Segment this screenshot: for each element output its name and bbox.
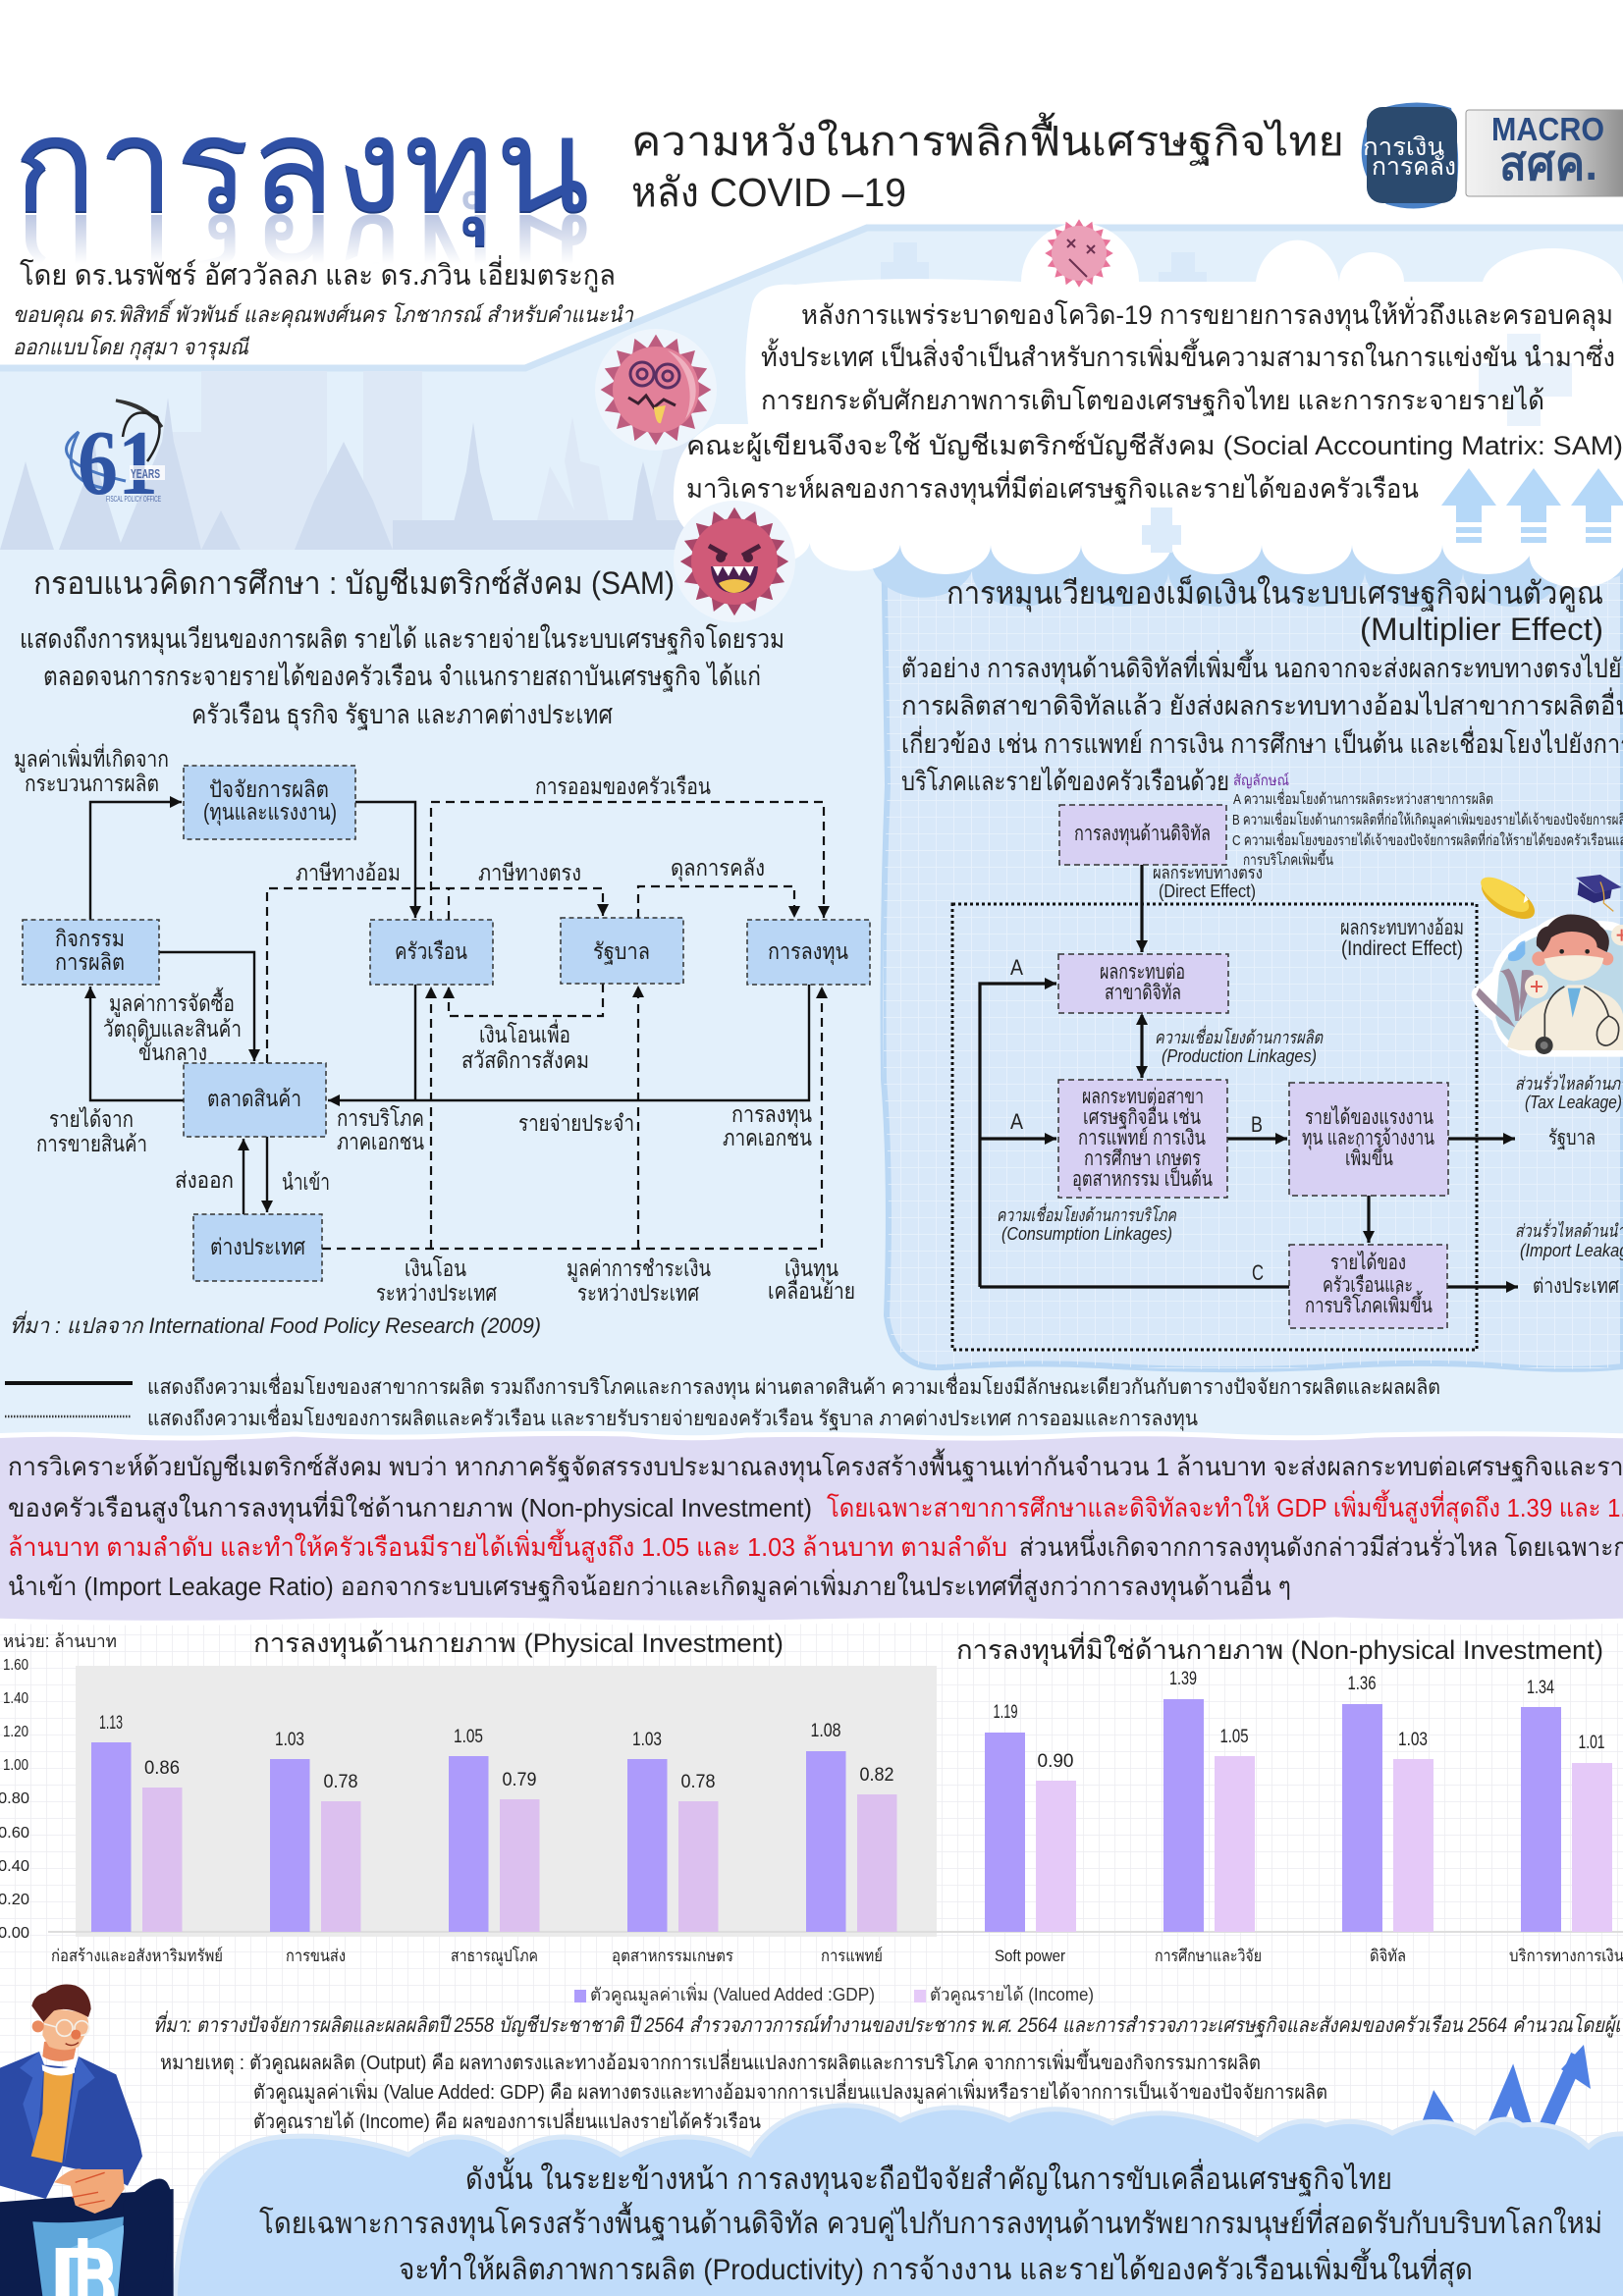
dashed flows <box>267 802 824 1249</box>
category labels <box>51 1946 883 1966</box>
flow labels <box>997 823 1623 1317</box>
logo: MACRO สศค. <box>1466 110 1623 196</box>
value labels: 0.78 <box>681 1772 715 1792</box>
flow labels: (Consumption Linkages) <box>1001 1224 1172 1244</box>
flow labels: การศึกษา เกษตร <box>1084 1148 1201 1170</box>
intro text <box>686 296 1623 506</box>
symbols key: สัญลักษณ์ <box>1233 773 1289 789</box>
diagram labels: ต่างประเทศ <box>210 1234 305 1259</box>
panel: SAM framework <box>10 565 870 1338</box>
SAM description: แสดงถึงการหมุนเวียนของการผลิต รายได้ และรายจ่ายในระบบเศรษฐกิจโดยรวม <box>20 623 784 656</box>
flow labels: ผลกระทบต่อ <box>1100 961 1185 984</box>
diagram labels: ครัวเรือน <box>395 938 467 964</box>
flow labels: A <box>1010 1109 1023 1134</box>
logo: 61 years: 61 <box>78 412 158 514</box>
logo: 61 years: YEARS <box>131 466 160 481</box>
diagram labels: วัตถุดิบและสินค้า <box>103 1016 242 1042</box>
bars <box>985 1699 1612 1932</box>
analysis text: ของครัวเรือนสูงในการลงทุนที่มิใช่ด้านกายภาพ (Non-physical Investment) <box>8 1490 812 1523</box>
value labels: 1.08 <box>811 1721 840 1741</box>
flow labels: สาขาดิจิทัล <box>1105 982 1181 1004</box>
unit label: หน่วย: ล้านบาท <box>3 1631 117 1651</box>
pale plus marks inside cloud <box>1142 334 1572 553</box>
logo: การเงินการคลัง: การเงิน <box>1363 133 1444 161</box>
flow labels: ผลกระทบต่อสาขา <box>1082 1086 1204 1108</box>
flow labels: ผลกระทบทางตรง <box>1153 863 1263 882</box>
diagram labels: ส่งออก <box>175 1167 234 1193</box>
chart legend: ตัวคูณรายได้ (Income) <box>930 1984 1094 2005</box>
diagram labels: กระบวนการผลิต <box>25 771 159 796</box>
multiplier description: บริโภคและรายได้ของครัวเรือนด้วย <box>901 767 1229 796</box>
value labels: 0.90 <box>1037 1751 1074 1772</box>
value labels: 1.01 <box>1579 1733 1604 1753</box>
category labels: การขนส่ง <box>286 1947 346 1965</box>
flow labels: รัฐบาล <box>1548 1127 1596 1149</box>
diagram labels: สวัสดิการสังคม <box>461 1047 589 1073</box>
flow boxes <box>1058 805 1448 1328</box>
diagram labels: ดุลการคลัง <box>671 855 765 881</box>
y axis ticks: 1.00 <box>3 1757 28 1774</box>
diagram labels: รายจ่ายประจำ <box>518 1110 634 1136</box>
title: การลงทุน <box>13 93 590 245</box>
diagram labels: กิจกรรม <box>55 926 125 951</box>
chart: non-physical investment <box>956 1631 1623 1965</box>
value labels: 1.19 <box>994 1702 1017 1723</box>
flow labels: (Direct Effect) <box>1159 881 1256 901</box>
diagram labels: ขั้นกลาง <box>138 1037 207 1065</box>
diagram labels <box>14 743 855 1306</box>
flow labels: B <box>1251 1112 1263 1137</box>
conclusion text <box>259 2158 1602 2288</box>
chart title: การลงทุนที่มิใช่ด้านกายภาพ (Non-physical Investment) <box>956 1631 1603 1667</box>
icon: growth arrow <box>1420 2045 1591 2169</box>
diagram labels: การขายสินค้า <box>36 1131 147 1156</box>
intro text: คณะผู้เขียนจึงจะใช้ บัญชีเมตริกซ์บัญชีสังคม (Social Accounting Matrix: SAM) <box>686 430 1623 461</box>
diagram labels: ภาษีทางตรง <box>478 860 581 885</box>
value labels: 1.03 <box>275 1730 304 1750</box>
conclusion text: ดังนั้น ในระยะข้างหน้า การลงทุนจะถือปัจจัยสำคัญในการขับเคลื่อนเศรษฐกิจไทย <box>465 2158 1392 2198</box>
analysis text: ล้านบาท ตามลำดับ และทำให้ครัวเรือนมีรายได้เพิ่มขึ้นสูงถึง 1.05 และ 1.03 ล้านบาท ตามลำดับ <box>8 1528 1007 1563</box>
legend lines: แสดงถึงความเชื่อมโยงของสาขาการผลิต รวมถึงการบริโภคและการลงทุน ผ่านตลาดสินค้า ความเชื่อมโยงมีลักษณะเดียวกันกับตารางปัจจัยการผลิตและผลผลิต <box>147 1372 1440 1400</box>
chart title: การลงทุนด้านกายภาพ (Physical Investment) <box>253 1629 784 1660</box>
heading: multiplier: (Multiplier Effect) <box>1360 612 1603 647</box>
value labels: 0.78 <box>324 1772 357 1792</box>
plot area <box>76 1666 937 1937</box>
analysis text <box>8 1448 1623 1602</box>
notes: ตัวคูณรายได้ (Income) คือ ผลของการเปลี่ยนแปลงรายได้ครัวเรือน <box>253 2108 761 2134</box>
category labels: สาธารณูปโภค <box>451 1946 538 1966</box>
notes <box>160 2049 1327 2134</box>
intro cloud backdrop <box>674 223 1623 588</box>
logo: MACRO สศค.: สศค. <box>1499 138 1597 190</box>
right panel: multiplier background <box>884 530 1623 1369</box>
diagram labels: การลงทุน <box>731 1101 812 1128</box>
flow labels: การบริโภคเพิ่มขึ้น <box>1305 1291 1433 1317</box>
diagram labels: เงินทุน <box>784 1255 839 1282</box>
logo: การเงินการคลัง: การคลัง <box>1372 153 1456 181</box>
legend lines: แสดงถึงความเชื่อมโยงของการผลิตและครัวเรือน และรายรับรายจ่ายของครัวเรือน รัฐบาล ภาคต่างประเทศ การออมและการลงทุน <box>147 1404 1198 1431</box>
SAM description: ตลอดจนการกระจายรายได้ของครัวเรือน จำแนกรายสถาบันเศรษฐกิจ ได้แก่ <box>43 662 761 692</box>
subtitle <box>631 112 1344 215</box>
acknowledgements: ออกแบบโดย กุสุมา จารุมณี <box>13 335 250 360</box>
logo: การเงินการคลัง <box>1362 102 1458 208</box>
title: การลงทุน <box>13 95 590 247</box>
node boxes <box>23 766 870 1281</box>
authors: โดย ดร.นรพัชร์ อัศววัลลภ และ ดร.ภวิน เอี่ยมตระกูล <box>20 255 616 293</box>
symbols key: การบริโภคเพิ่มขึ้น <box>1243 849 1333 869</box>
y axis ticks: 1.20 <box>3 1724 28 1740</box>
flow labels: (Indirect Effect) <box>1341 937 1463 960</box>
diagram labels: เงินโอน <box>405 1255 466 1281</box>
acknowledgements: ขอบคุณ ดร.พิสิทธิ์ พัวพันธ์ และคุณพงศ์นคร โภชากรณ์ สำหรับคำแนะนำ <box>13 298 634 328</box>
solid flows <box>90 802 809 1214</box>
SAM description: ครัวเรือน ธุรกิจ รัฐบาล และภาคต่างประเทศ <box>191 700 613 731</box>
category labels: ดิจิทัล <box>1370 1947 1406 1965</box>
value labels: 1.05 <box>1219 1727 1249 1747</box>
icon: coin <box>1476 871 1541 927</box>
value labels: 1.13 <box>99 1713 123 1734</box>
heading: SAM: กรอบแนวคิดการศึกษา : บัญชีเมตริกซ์สังคม (SAM) <box>33 565 675 601</box>
flow labels: เพิ่มขึ้น <box>1345 1144 1393 1170</box>
conclusion text: จะทำให้ผลิตภาพการผลิต (Productivity) การจ้างงาน และรายได้ของครัวเรือนเพิ่มขึ้นในที่สุด <box>399 2248 1473 2288</box>
chart: physical investment <box>0 1629 1623 1966</box>
notes: หมายเหตุ : ตัวคูณผลผลิต (Output) คือ ผลทางตรงและทางอ้อมจากการเปลี่ยนแปลงการผลิตและการบริโภค จากการเพิ่มขึ้นของกิจกรรมการผลิต <box>160 2049 1261 2075</box>
flow labels: รายได้ของแรงงาน <box>1305 1105 1434 1129</box>
diagram labels: มูลค่าการจัดซื้อ <box>109 988 235 1017</box>
value labels: 1.39 <box>1169 1669 1197 1689</box>
diagram labels: ภาคเอกชน <box>337 1129 424 1154</box>
icon: doctor <box>1472 914 1623 1057</box>
value labels: 0.82 <box>860 1765 893 1786</box>
y axis ticks: 1.60 <box>3 1657 28 1674</box>
heading: multiplier <box>947 574 1603 647</box>
illustration: man sitting <box>0 1984 174 2296</box>
intro text: การยกระดับศักยภาพการเติบโตของเศรษฐกิจไทย และการกระจายรายได้ <box>761 386 1544 416</box>
diagram labels: ภาษีทางอ้อม <box>296 860 401 885</box>
flow labels: อุตสาหกรรม เป็นต้น <box>1072 1165 1213 1192</box>
flow labels: รายได้ของ <box>1330 1251 1406 1274</box>
arrows <box>980 865 1518 1287</box>
icon: three up arrows <box>1441 468 1623 543</box>
logo: MACRO สศค.: MACRO <box>1491 111 1604 147</box>
symbols key: A ความเชื่อมโยงด้านการผลิตระหว่างสาขาการผลิต <box>1233 788 1493 808</box>
category labels: ก่อสร้างและอสังหาริมทรัพย์ <box>51 1947 223 1965</box>
diagram labels: การออมของครัวเรือน <box>535 774 711 799</box>
multiplier description <box>901 649 1623 796</box>
panel: analysis strip <box>0 1433 1623 1623</box>
flow labels: (Production Linkages) <box>1162 1046 1317 1066</box>
diagram labels: รัฐบาล <box>593 938 650 965</box>
value labels: 1.36 <box>1347 1674 1377 1694</box>
category labels: การศึกษาและวิจัย <box>1155 1947 1262 1965</box>
chart legend <box>574 1982 1094 2005</box>
value labels <box>99 1713 893 1792</box>
panel: conclusion cloud <box>175 2106 1623 2296</box>
value labels <box>994 1669 1604 1772</box>
category labels: การแพทย์ <box>821 1947 883 1965</box>
subtitle: ความหวังในการพลิกฟื้นเศรษฐกิจไทย <box>631 112 1344 166</box>
flow labels: ความเชื่อมโยงด้านการผลิต <box>1155 1025 1324 1047</box>
diagram labels: ระหว่างประเทศ <box>376 1280 497 1306</box>
intro text: มาวิเคราะห์ผลของการลงทุนที่มีต่อเศรษฐกิจและรายได้ของครัวเรือน <box>686 470 1419 506</box>
diagram labels: ระหว่างประเทศ <box>577 1280 699 1306</box>
icon: graduation cap <box>1576 875 1622 911</box>
title reflection: การลงทุน <box>13 181 590 333</box>
value labels: 1.05 <box>454 1727 483 1747</box>
subtitle: หลัง COVID –19 <box>631 170 906 215</box>
analysis text: นำเข้า (Import Leakage Ratio) ออกจากระบบเศรษฐกิจน้อยกว่าและเกิดมูลค่าเพิ่มภายในประเทศที่สูงกว่าการลงทุนด้านอื่น ๆ <box>8 1569 1291 1602</box>
pale plus marks behind cloud <box>881 242 1207 313</box>
diagram labels: เคลื่อนย้าย <box>768 1275 855 1304</box>
SAM flow diagram <box>14 743 870 1306</box>
flow labels: ความเชื่อมโยงด้านการบริโภค <box>997 1202 1177 1225</box>
category labels: Soft power <box>995 1947 1065 1965</box>
flow labels: ทุน และการจ้างงาน <box>1302 1127 1434 1150</box>
diagram labels: (ทุนและแรงงาน) <box>203 799 337 826</box>
axis line <box>48 1931 1623 1933</box>
icon: small virus <box>1045 219 1113 288</box>
flow labels: การลงทุนด้านดิจิทัล <box>1074 823 1211 846</box>
flow labels: A <box>1010 955 1023 980</box>
chart legend: ตัวคูณมูลค่าเพิ่ม (Valued Added :GDP) <box>590 1982 875 2005</box>
y axis ticks: 1.40 <box>3 1690 28 1707</box>
skyline illustration <box>0 371 707 550</box>
SAM description <box>20 623 784 731</box>
diagram labels: เงินโอนเพื่อ <box>479 1019 570 1047</box>
flow labels: เศรษฐกิจอื่น เช่น <box>1083 1102 1201 1129</box>
y axis ticks <box>0 1657 29 1942</box>
flow labels: การแพทย์ การเงิน <box>1078 1126 1206 1149</box>
diagram labels: ภาคเอกชน <box>723 1125 812 1150</box>
flow labels: C <box>1252 1260 1264 1285</box>
value labels: 0.79 <box>503 1770 536 1790</box>
indirect effect boundary <box>952 904 1477 1350</box>
bars <box>91 1742 897 1932</box>
value labels: 1.03 <box>632 1730 662 1750</box>
diagram labels: มูลค่าการชำระเงิน <box>567 1255 711 1282</box>
category labels: อุตสาหกรรมเกษตร <box>612 1947 733 1966</box>
multiplier flow chart <box>952 805 1623 1350</box>
legend lines <box>5 1372 1440 1431</box>
diagram labels: ปัจจัยการผลิต <box>209 776 329 802</box>
notes: ตัวคูณมูลค่าเพิ่ม (Value Added: GDP) คือ ผลทางตรงและทางอ้อมจากการเปลี่ยนแปลงมูลค่าเพิ่มหรือรายได้จากการเป็นเจ้าของปัจจัยการผลิต <box>253 2078 1327 2105</box>
panel: multiplier effect <box>901 574 1623 1350</box>
icon: dizzy virus <box>595 329 717 451</box>
value labels: 1.03 <box>1398 1730 1428 1750</box>
diagram labels: การบริโภค <box>337 1105 424 1131</box>
diagram labels: นำเข้า <box>282 1169 330 1195</box>
flow labels: ผลกระทบทางอ้อม <box>1340 917 1464 939</box>
diagram labels: การผลิต <box>55 949 125 975</box>
logo: 61 years: FISCAL POLICY OFFICE <box>106 495 161 504</box>
flow labels: ครัวเรือนและ <box>1323 1274 1413 1297</box>
value labels: 0.86 <box>144 1758 180 1779</box>
category labels <box>995 1947 1623 1965</box>
value labels: 1.34 <box>1527 1678 1554 1698</box>
cloud shadow <box>872 530 1623 607</box>
acknowledgements <box>13 298 634 360</box>
icon: angry virus <box>674 501 795 622</box>
diagram labels: ตลาดสินค้า <box>207 1086 301 1111</box>
diagram labels: การลงทุน <box>768 938 848 965</box>
diagram labels: รายได้จาก <box>49 1106 134 1132</box>
diagram labels: มูลค่าเพิ่มที่เกิดจาก <box>14 743 169 773</box>
SAM source: ที่มา : แปลจาก International Food Policy Research (2009) <box>10 1310 541 1338</box>
symbols key <box>1232 773 1623 869</box>
